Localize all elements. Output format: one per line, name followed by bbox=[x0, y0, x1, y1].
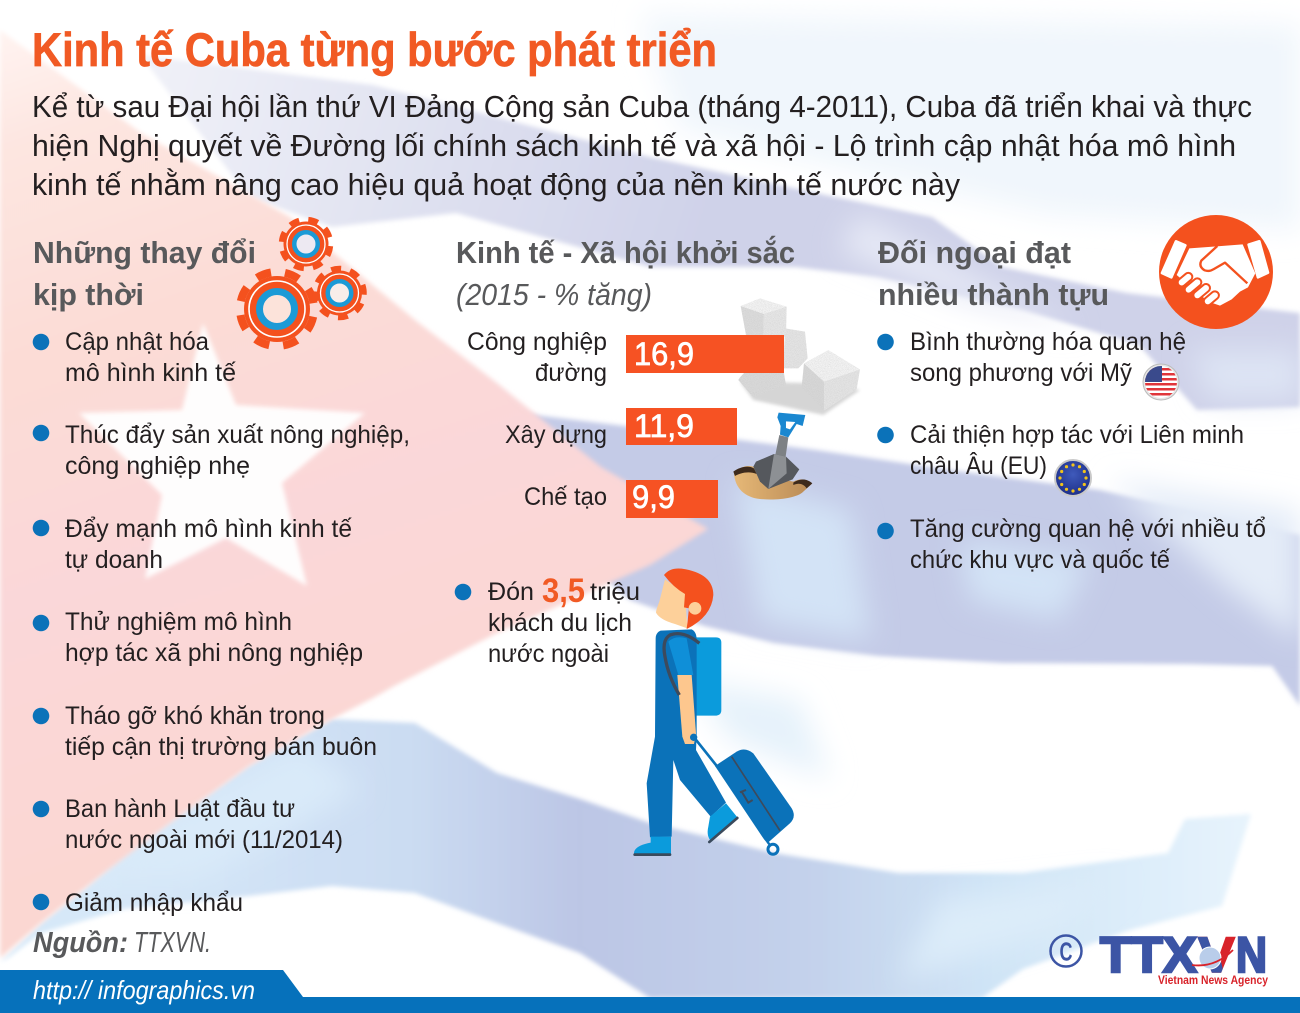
bar: sugar industry: Công nghiệp bbox=[467, 328, 607, 356]
bullet list: changes: hợp tác xã phi nông nghiệp bbox=[65, 639, 363, 667]
bullet list: foreign relations: song phương với Mỹ bbox=[910, 359, 1132, 387]
logo: TTXVN bbox=[1099, 936, 1268, 986]
panel: foreign relations bbox=[877, 215, 1273, 574]
icon: gears bbox=[233, 217, 372, 353]
heading: changes: Những thay đổi bbox=[33, 235, 256, 270]
bullet list: changes: Thử nghiệm mô hình bbox=[65, 608, 292, 636]
intro paragraph: kinh tế nhằm nâng cao hiệu quả hoạt động của nền kinh tế nước này bbox=[32, 167, 960, 202]
bullet list: changes: công nghiệp nhẹ bbox=[65, 452, 250, 480]
bar: manufacturing: Chế tạo bbox=[524, 483, 607, 511]
logo: TTXVN: Vietnam News Agency bbox=[1158, 975, 1269, 987]
copyright symbol: C bbox=[1060, 936, 1073, 966]
lower band bbox=[0, 719, 1251, 998]
bullet list: changes: mô hình kinh tế bbox=[65, 359, 236, 387]
bar: manufacturing bbox=[524, 479, 718, 518]
bullet list: changes bbox=[33, 328, 410, 917]
logo: TTXVN: V bbox=[1198, 927, 1236, 983]
heading: changes: kịp thời bbox=[33, 277, 144, 312]
copyright symbol bbox=[1050, 936, 1082, 966]
bullet list: changes: Thúc đẩy sản xuất nông nghiệp, bbox=[65, 421, 410, 449]
intro paragraph: Kể từ sau Đại hội lần thứ VI Đảng Cộng sản Cuba (tháng 4-2011), Cuba đã triển khai và thực bbox=[32, 89, 1252, 124]
bullet list: foreign relations: Bình thường hóa quan hệ bbox=[910, 328, 1186, 356]
bullet list: foreign relations: Tăng cường quan hệ với nhiều tổ bbox=[910, 515, 1266, 543]
bar chart: growth by sector bbox=[467, 328, 784, 518]
bullet list: changes: Đẩy mạnh mô hình kinh tế bbox=[65, 515, 352, 543]
icon: shovel in soil bbox=[733, 413, 812, 499]
tourism callout bbox=[455, 572, 640, 668]
upper lavender streak bbox=[140, 55, 1300, 410]
bar: construction: Xây dựng bbox=[505, 421, 607, 449]
icon: handshake bbox=[1159, 215, 1273, 329]
heading: foreign relations: nhiều thành tựu bbox=[878, 277, 1109, 312]
footer band bbox=[0, 970, 1300, 1013]
bullet list: foreign relations: châu Âu (EU) bbox=[910, 451, 1047, 480]
bullet list: changes: Ban hành Luật đầu tư bbox=[65, 795, 295, 823]
tourism callout: khách du lịch bbox=[488, 609, 632, 637]
tourism callout: nước ngoài bbox=[488, 640, 609, 668]
heading: economy: Kinh tế - Xã hội khởi sắc bbox=[456, 234, 795, 270]
bullet list: foreign relations: chức khu vực và quốc tế bbox=[910, 546, 1170, 574]
tourism callout: triệu bbox=[590, 578, 640, 606]
source: TTXVN. bbox=[134, 927, 211, 959]
heading: economy: (2015 - % tăng) bbox=[456, 277, 652, 312]
logo: TTXVN: TTX bbox=[1100, 927, 1197, 983]
bullet list: changes: tự doanh bbox=[65, 546, 163, 574]
intro paragraph bbox=[32, 89, 1252, 202]
logo: TTXVN: V bbox=[1198, 927, 1236, 983]
icon: EU flag bbox=[1055, 460, 1091, 496]
bar: manufacturing: 9,9 bbox=[632, 479, 675, 515]
bullet list: changes: Giảm nhập khẩu bbox=[65, 889, 243, 917]
bar: sugar industry bbox=[467, 328, 784, 387]
heading: changes bbox=[33, 235, 256, 312]
bullet list: changes: Tháo gỡ khó khăn trong bbox=[65, 702, 325, 730]
panel: economy and society bbox=[455, 234, 860, 855]
bullet list: changes: tiếp cận thị trường bán buôn bbox=[65, 733, 377, 761]
icon: US flag bbox=[1143, 364, 1179, 400]
bullet list: foreign relations bbox=[877, 328, 1266, 574]
icon: sugar cubes bbox=[738, 298, 860, 415]
bar: sugar industry: 16,9 bbox=[634, 336, 694, 372]
bar: construction bbox=[505, 408, 737, 449]
logo: TTXVN: N bbox=[1236, 927, 1267, 983]
icon: walking tourist with suitcase bbox=[634, 568, 794, 855]
title: Kinh tế Cuba từng bước phát triển bbox=[32, 23, 717, 76]
flag star bbox=[79, 323, 365, 586]
tourism callout: Đón bbox=[488, 578, 534, 606]
intro paragraph: hiện Nghị quyết về Đường lối chính sách kinh tế và xã hội - Lộ trình cập nhật hóa mô hình bbox=[32, 128, 1236, 163]
bullet list: foreign relations: Cải thiện hợp tác với Liên minh bbox=[910, 421, 1244, 449]
heading: foreign relations bbox=[878, 235, 1109, 312]
heading: foreign relations: Đối ngoại đạt bbox=[878, 235, 1071, 270]
bullet list: changes: Cập nhật hóa bbox=[65, 328, 209, 356]
pink triangle bbox=[0, 30, 708, 958]
panel: changes bbox=[33, 217, 410, 917]
source: Nguồn: bbox=[33, 927, 128, 959]
middle lavender band bbox=[518, 413, 1300, 706]
bar: sugar industry: đường bbox=[535, 359, 607, 387]
footer band: http:// infographics.vn bbox=[33, 975, 255, 1005]
source bbox=[33, 927, 211, 959]
heading: economy bbox=[456, 234, 795, 312]
bar: construction: 11,9 bbox=[634, 408, 694, 444]
bullet list: changes: nước ngoài mới (11/2014) bbox=[65, 826, 343, 854]
pale streaks inside the bands bbox=[60, 215, 1300, 980]
tourism callout: 3,5 bbox=[542, 572, 585, 610]
